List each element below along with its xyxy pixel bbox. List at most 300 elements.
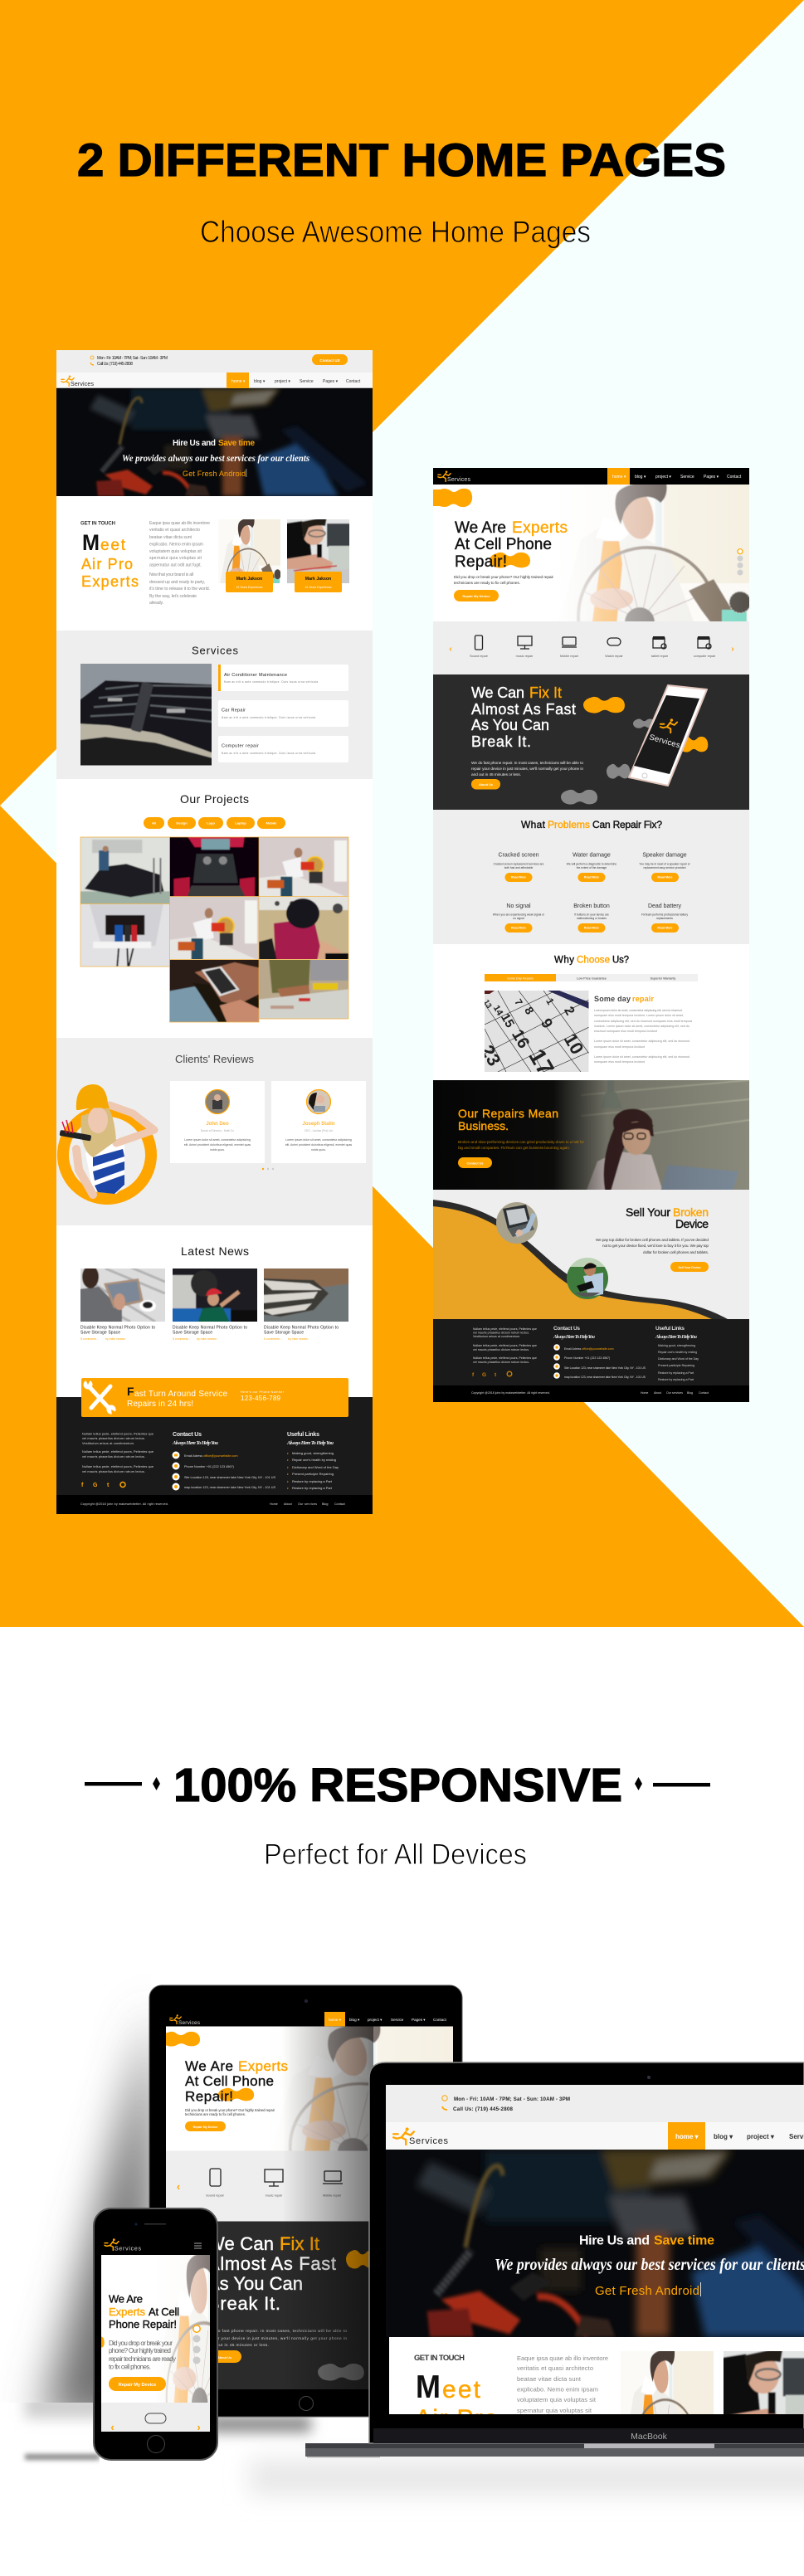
navigation bar: project ▾ xyxy=(655,475,671,480)
laptop screen: GET IN TOUCH xyxy=(414,2354,465,2363)
header bar: Mon - Fri: 10AM - 7PM; Sat - Sun: 10AM - 3PM xyxy=(97,356,168,361)
section: what problems can repair fix: Can Repair Fix? xyxy=(592,819,662,830)
photo: calendar: 8 xyxy=(522,1005,537,1017)
section: footer: Dictionary and Word of the Day xyxy=(292,1465,339,1469)
section: what problems can repair fix: Read More xyxy=(511,876,526,879)
section: footer: Contact xyxy=(334,1502,345,1506)
tablet screen: Mobile repair xyxy=(323,2194,342,2197)
section: footer: Copyright @2018 john by makewebbetter. All right reserved. xyxy=(471,1391,550,1395)
hero: cell phone repair: Repair! xyxy=(455,553,507,571)
tablet screen: home ▾ xyxy=(329,2018,342,2022)
laptop screen: explicabo. Nemo enim ipsam xyxy=(517,2386,598,2393)
section: footer: Blog xyxy=(322,1502,328,1506)
section: what problems can repair fix: both fast and affordable xyxy=(504,866,533,869)
section: footer: Vestibulum arisus at condimentum. xyxy=(82,1442,134,1445)
photo: calendar: 17 xyxy=(524,1045,559,1079)
section: get in touch: Air Pro xyxy=(81,556,133,572)
photo: calendar xyxy=(477,991,589,1079)
call to action banner: F xyxy=(127,1385,134,1398)
section: footer: Restore by replacing a Part xyxy=(658,1371,694,1375)
section: why choose us: eiusmod numquam eius modi tempora incidunt xyxy=(594,1030,657,1033)
section: footer: Nullam tellus pede, eleifend poors, Pellentes que xyxy=(82,1432,153,1435)
section: fix it fast: Almost As Fast xyxy=(471,701,576,718)
section: what problems can repair fix: no signal xyxy=(513,917,524,920)
section: what problems can repair fix: Read More xyxy=(658,926,672,929)
tablet screen: Services xyxy=(178,2020,201,2026)
phone screen: ‹ xyxy=(110,2421,115,2433)
section: clients reviews: CEO - Lacinia (Pvt) Ltd. xyxy=(305,1129,333,1132)
laptop screen: beatae vitae dicta sunt xyxy=(517,2375,582,2383)
section: get in touch: dressed up and ready to party, xyxy=(149,580,205,585)
section: what problems can repair fix: FixTeam performs professional battery xyxy=(641,913,688,916)
section: our projects: Our Projects xyxy=(180,792,249,806)
section: footer: map location 123, near shammer lake New York City, NY - 101 US xyxy=(564,1376,646,1379)
section: latest news: Save Storage Space xyxy=(173,1331,212,1336)
section: get in touch: By the way, let's celebrate xyxy=(149,594,197,599)
section: what problems can repair fix: Problems xyxy=(548,819,590,830)
tablet screen: We Are xyxy=(185,2058,233,2074)
section: footer: › xyxy=(287,1472,289,1477)
section: fix it fast: Fix It xyxy=(529,684,562,701)
section: services: Services xyxy=(192,644,239,657)
tablet screen: Did you drop or break your phone? Our highly trained repair xyxy=(185,2108,275,2112)
section: services: Nam ac elit a ante commodo tristique. Duis lacus urna vehicula xyxy=(224,680,318,684)
photo: calendar: 2 xyxy=(561,1005,577,1018)
section: footer: Email Adress office@yourwebsite.com xyxy=(564,1347,614,1351)
section: what problems can repair fix: replacements xyxy=(656,917,673,920)
section: why choose us: Us? xyxy=(612,956,629,966)
section: footer: › xyxy=(287,1465,289,1470)
section: why choose us: numquam eius modi tempora incidunt xyxy=(594,1045,645,1049)
section: footer: Restore by replacing a Part xyxy=(658,1378,694,1381)
laptop screen: home ▾ xyxy=(675,2133,699,2140)
section: services: Nam ac elit a ante commodo tristique. Duis lacus urna vehicula xyxy=(222,716,315,719)
section: get in touch: beatae vitae dicta sunt xyxy=(149,535,192,540)
section: footer: Useful Links xyxy=(655,1326,685,1332)
section: footer: Always Here To Help You xyxy=(553,1334,595,1340)
header bar xyxy=(56,350,373,373)
tablet screen: Fix It xyxy=(280,2233,319,2254)
navigation bar: Contact xyxy=(346,379,361,384)
section: what problems can repair fix: malfunctioning or broken xyxy=(577,917,607,920)
section: footer: t xyxy=(107,1483,110,1488)
section: get in touch: Now that your brand is all xyxy=(149,572,193,577)
photo: cable connectors xyxy=(80,904,169,967)
navigation bar xyxy=(433,468,749,485)
section: footer: Site Location 123, near shammer lake New York City, NY - 101 US xyxy=(184,1476,275,1479)
section: why choose us: Lorem ipsum dolor sit amet, consectetur adipiscing elit, sed do eiusmod xyxy=(594,1040,689,1043)
service icons row: Mobile repair xyxy=(560,655,579,658)
section: footer: vel mauris phasellus dictum rutrum lectus. xyxy=(82,1470,145,1473)
subheading: perfect for all devices: Perfect for All Devices xyxy=(264,1838,527,1871)
photo: calendar: 14 xyxy=(491,1004,505,1018)
section: footer: vel mauris phasellus dictum rutrum lectus. xyxy=(473,1348,529,1351)
tablet screen: and out in 45 minutes or less. xyxy=(207,2343,269,2348)
tablet screen: ‹ xyxy=(177,2180,180,2193)
illustration: worker in orange ring xyxy=(60,1084,154,1199)
section: footer: Always Here To Help You xyxy=(286,1440,334,1446)
navigation bar: Contact xyxy=(727,475,742,480)
illustration: tilted smartphone xyxy=(629,685,707,786)
hero: cell phone repair: Experts xyxy=(512,519,568,537)
section: clients reviews: Clients' Reviews xyxy=(175,1053,254,1065)
section: why choose us: Lorem ipsum dolor sit amet, consectetur adipiscing elit, sed do eiusmod xyxy=(594,1055,689,1059)
section: what problems can repair fix: Read More xyxy=(658,876,672,879)
hero banner: Get Fresh Android xyxy=(183,470,246,478)
hero banner: Hire Us and xyxy=(173,439,216,448)
section: what problems can repair fix: If buttons on your device are xyxy=(574,913,609,916)
laptop screen: Services xyxy=(409,2136,448,2146)
navigation bar: blog ▾ xyxy=(635,475,646,480)
laptop screen: veritatis et quasi architecto xyxy=(517,2364,593,2372)
laptop screen: voluptatem quia voluptas sit xyxy=(517,2396,597,2403)
photo: calendar: 10 xyxy=(560,1030,588,1058)
tablet screen: Almost As Fast xyxy=(207,2253,336,2274)
device: laptop xyxy=(305,2062,804,2505)
section: footer: › xyxy=(287,1458,289,1463)
section: get in touch: Experts xyxy=(81,573,139,590)
section: footer: Nullam tellus pede, eleifend poors, Pellentes que xyxy=(473,1356,537,1360)
section: footer: Dictionary and Word of the Day xyxy=(658,1357,699,1361)
section: footer: Repair one's health by resting xyxy=(658,1351,697,1354)
laptop screen: M xyxy=(416,2369,441,2405)
tablet screen: Contact xyxy=(433,2018,447,2022)
section: our repairs mean business: Our Repairs Mean xyxy=(458,1107,558,1120)
section: clients reviews: John Deo xyxy=(206,1122,229,1127)
section: what problems can repair fix: Read More xyxy=(584,926,599,929)
section: our projects: Logo xyxy=(207,821,215,825)
device: tablet xyxy=(149,1985,470,2417)
photo: calendar: 13 xyxy=(482,998,494,1010)
laptop screen: Hire Us and xyxy=(579,2233,650,2248)
section: what problems can repair fix: When you are experiencing weak signal or xyxy=(493,913,545,916)
hero banner xyxy=(56,388,373,496)
title: 2 DIFFERENT HOME PAGES xyxy=(77,134,726,186)
section: footer: › xyxy=(287,1480,289,1485)
section: footer: Present participle Repairing xyxy=(658,1364,694,1367)
section: get in touch: 12 Years Experience xyxy=(236,586,263,589)
laptop screen: Save time xyxy=(654,2233,714,2248)
call to action banner: Here's our Phone Number xyxy=(241,1390,285,1394)
tablet screen: At Cell Phone xyxy=(185,2073,274,2089)
section: fix it fast: Break It. xyxy=(471,733,531,750)
photo: tablet user circle xyxy=(567,1258,608,1299)
tablet screen: Break It. xyxy=(207,2293,280,2314)
tablet screen: We Can xyxy=(207,2233,274,2254)
call to action banner xyxy=(81,1378,348,1417)
hero: cell phone repair xyxy=(433,480,755,685)
service icons row: Sound repair xyxy=(470,655,489,658)
section: what problems can repair fix: Dead battery xyxy=(648,903,682,909)
photo: calendar: 15 xyxy=(498,1011,517,1030)
section: footer: Our services xyxy=(298,1502,317,1506)
navigation bar: Pages ▾ xyxy=(323,379,339,384)
photo: man at mitre saw xyxy=(256,835,351,898)
section: sell your broken device: Broken xyxy=(673,1205,709,1219)
section: clients reviews: Borad of Director - Multi Co xyxy=(201,1129,234,1132)
hero: cell phone repair: Did you drop or break your phone? Our highly trained repair xyxy=(454,575,553,580)
section: get in touch: voluptatem quia voluptas sit xyxy=(149,549,202,554)
device shadows xyxy=(25,2008,804,2496)
section: our repairs mean business: big and small companies. FixTeam can get business booming again. xyxy=(458,1146,570,1151)
navigation bar: Services xyxy=(71,382,95,387)
tablet screen: project ▾ xyxy=(368,2018,383,2022)
section: latest news: 5 comments - xyxy=(80,1337,99,1341)
section: what problems can repair fix: You may be in need of a speaker repair or xyxy=(639,863,691,866)
section: services: Air Conditioner Maintenance xyxy=(224,673,287,678)
section: services xyxy=(56,631,373,779)
section: fix it fast: We do fast phone repair. In most cases, technicians will be able to xyxy=(471,761,583,766)
section: footer: Our services xyxy=(666,1391,683,1395)
section: latest news: Disable Keep Normal Photo Option to xyxy=(80,1326,155,1331)
section: clients reviews: elit. Animi provident doloribus eligendi, eveniet quas xyxy=(285,1143,352,1147)
phone screen: › xyxy=(197,2421,201,2433)
navigation bar: Pages ▾ xyxy=(704,475,719,480)
hero: cell phone repair: At Cell Phone xyxy=(455,536,552,553)
section: latest news: by mike newton xyxy=(105,1337,125,1341)
navigation bar: home ▾ xyxy=(612,475,626,480)
section: services: Car Repair xyxy=(222,709,246,713)
section: footer: vel mauris phasellus dictum rutrum lectus. xyxy=(82,1455,145,1458)
tablet screen: repair your device in just minutes, we'll normally get your phone in xyxy=(207,2336,347,2341)
panel: home page 1 mockup xyxy=(56,350,373,1514)
photo: laptop user circle xyxy=(496,1202,538,1244)
device: phone xyxy=(91,2208,262,2471)
section: latest news: 5 comments - xyxy=(173,1337,191,1341)
section: what problems can repair fix: the extent of the damage xyxy=(577,866,607,869)
photo: phone in hands xyxy=(169,960,259,1022)
section: footer: G xyxy=(482,1372,486,1378)
header bar: Contact US xyxy=(319,358,340,363)
section: footer: Home xyxy=(270,1502,278,1506)
illustration: tilted smartphone: Services xyxy=(648,733,681,750)
section: why choose us: numquam eius modi tempora incidunt. Lorem ipsum dolor sit amet, xyxy=(594,1014,684,1017)
hero: cell phone repair: Repair My Device xyxy=(462,594,490,598)
panel: home page 2 mockup xyxy=(427,468,755,1402)
section: footer: map location 123, near shammer lake New York City, NY - 101 US xyxy=(184,1486,275,1489)
section: footer: Contact Us xyxy=(553,1326,580,1332)
section: latest news: by mike newton xyxy=(288,1337,308,1341)
tablet screen: Experts xyxy=(238,2058,288,2074)
section: fix it fast: and out in 45 minutes or less. xyxy=(471,772,521,777)
section: fix it fast: As You Can xyxy=(471,717,549,733)
section: footer xyxy=(433,1319,749,1402)
section: get in touch: 12 Years Experience xyxy=(305,586,332,589)
section: why choose us: Some day xyxy=(594,995,631,1003)
section: what problems can repair fix: We will perform a diagnostic to determine xyxy=(567,863,616,866)
section: what problems can repair fix: Read More xyxy=(584,876,599,879)
navigation bar: home ▾ xyxy=(231,379,246,384)
photo: calendar: 9 xyxy=(538,1015,556,1031)
photo: engine on stand xyxy=(80,838,169,904)
section: footer: Nullam tellus pede, eleifend poors, Pellentes que xyxy=(473,1327,537,1331)
section: our projects: Laptop xyxy=(235,821,246,825)
photo: man at workbench xyxy=(259,960,348,1019)
section: sell your broken device: dollar for broken cell phones and tablets. xyxy=(643,1250,709,1254)
section: what problems can repair fix: Cracked screen xyxy=(498,853,539,859)
section: sell your broken device: not to get your device fixed, we'd love to buy it for you. We pay top xyxy=(602,1244,709,1248)
section: get in touch xyxy=(56,496,373,631)
laptop screen: Get Fresh Android xyxy=(595,2284,699,2298)
section: services: Computer repair xyxy=(222,744,259,749)
service icons row: music repair xyxy=(516,655,534,658)
section: footer: Copyright @2018 john by makewebbetter. All right reserved. xyxy=(80,1502,168,1506)
service icons row: tablet repair xyxy=(651,655,669,658)
photo: man at mitre saw 2 xyxy=(167,894,261,962)
laptop screen: eet xyxy=(442,2376,481,2403)
section: footer: About xyxy=(284,1502,292,1506)
phone screen: We Are xyxy=(109,2293,143,2305)
section: why choose us xyxy=(433,944,749,1080)
tablet screen: About Us xyxy=(217,2356,231,2359)
call to action banner: 123-456-789 xyxy=(241,1395,281,1402)
laptop screen xyxy=(386,2085,804,2432)
section: latest news: Latest News xyxy=(181,1244,249,1258)
section: latest news: Save Storage Space xyxy=(80,1331,120,1336)
section: clients reviews: Lorem ipsum dolor sit amet, consectetur adipisicing xyxy=(184,1138,251,1142)
section: our repairs mean business: Broken and slow-performing devices can grind productivity down to a halt for xyxy=(458,1140,584,1145)
photo: calendar: 23 xyxy=(477,1041,505,1069)
section: footer: › xyxy=(287,1487,289,1492)
section: footer: › xyxy=(287,1452,289,1457)
phone screen: Did you drop or break your xyxy=(109,2340,173,2347)
section: our repairs mean business: Business. xyxy=(458,1119,509,1132)
service icons row xyxy=(433,621,749,674)
section: sell your broken device: Sell Your Device xyxy=(678,1266,701,1269)
hero banner: We provides always our best services for our clients xyxy=(122,452,309,464)
laptop screen: Call Us: (719) 445-2808 xyxy=(453,2106,514,2112)
service icons row: › xyxy=(731,645,734,654)
section: what problems can repair fix: Broken button xyxy=(573,903,610,909)
section: footer: Making good, strengthening xyxy=(658,1344,695,1347)
section: get in touch: Eaque ipsa quae ab illo inventore xyxy=(149,521,210,526)
navigation bar xyxy=(56,373,373,388)
laptop screen: Air Pro xyxy=(415,2405,498,2432)
section: footer: vel mauris phasellus dictum rutrum lectus. xyxy=(473,1331,529,1334)
section: get in touch: GET IN TOUCH xyxy=(80,521,115,526)
section: what problems can repair fix: No signal xyxy=(506,903,531,909)
section: footer: Repair one's health by resting xyxy=(292,1458,336,1462)
phone screen: Repair My Device xyxy=(119,2383,156,2388)
section: what problems can repair fix: What xyxy=(521,819,546,830)
section: get in touch: Mark Jakson xyxy=(305,577,331,582)
hero: cell phone repair: technicians are ready to fix cell phones. xyxy=(454,581,520,586)
photo: calendar: 7 xyxy=(512,997,525,1008)
photo: lab bench xyxy=(259,897,348,959)
section: get in touch: spernatur quia voluptas sit xyxy=(149,556,202,561)
photo: calendar: 16 xyxy=(508,1026,533,1052)
tablet screen: blog ▾ xyxy=(349,2018,360,2022)
section: sell your broken device: Device xyxy=(675,1217,709,1230)
section: latest news: 5 comments - xyxy=(264,1337,282,1341)
phone screen: At Cell xyxy=(149,2306,179,2318)
section: services: Nam ac elit a ante commodo tristique. Duis lacus urna vehicula xyxy=(222,752,315,755)
section: footer: Email Adress office@yourwebsite.com xyxy=(184,1454,238,1458)
section: sell your broken device: We pay top dollar for broken cell phones and tablets. If you've decided xyxy=(596,1238,709,1242)
section: footer: f xyxy=(81,1483,84,1488)
section: why choose us: Why xyxy=(554,956,574,966)
header bar: Call Us: (719) 445-2808 xyxy=(97,362,133,367)
section: clients reviews xyxy=(56,1038,373,1225)
laptop screen: Eaque ipsa quae ab illo inventore xyxy=(517,2354,608,2362)
section: footer: Nullam tellus pede, eleifend poors, Pellentes que xyxy=(82,1450,153,1454)
tablet screen: Service xyxy=(391,2018,404,2022)
section: latest news: Disable Keep Normal Photo Option to xyxy=(264,1326,339,1331)
tablet screen: Pages ▾ xyxy=(412,2018,426,2022)
section: why choose us: incidunt. Lorem ipsum dolor sit amet, consectetur adipiscing elit, sed do xyxy=(594,1025,689,1028)
phone screen: Experts xyxy=(109,2306,146,2318)
call to action banner: Repairs in 24 hrs! xyxy=(127,1400,193,1409)
section: clients reviews: elit. Animi provident doloribus eligendi, eveniet quas xyxy=(184,1143,251,1147)
section: get in touch: Mark Jakson xyxy=(236,577,262,582)
section: get in touch: M xyxy=(82,530,100,555)
navigation bar: project ▾ xyxy=(275,379,290,384)
section: our projects: All xyxy=(152,821,156,825)
section: our projects xyxy=(56,779,373,1038)
section: footer: Restore by replacing a Part xyxy=(292,1486,333,1490)
photo: calendar: 1 xyxy=(543,996,557,1007)
section: get in touch: aspernatur aut odit aut fugit. xyxy=(149,562,202,567)
photo: car console xyxy=(169,837,259,896)
tablet screen: Repair! xyxy=(185,2089,233,2104)
section: footer xyxy=(56,1397,373,1514)
navigation bar: Services xyxy=(447,477,471,483)
section: footer: Restore by replacing a Part xyxy=(292,1479,333,1483)
section: what problems can repair fix: Read More xyxy=(511,926,526,929)
tablet screen: technicians are ready to fix cell phones. xyxy=(185,2112,246,2116)
section: our projects: Design xyxy=(176,821,188,825)
laptop screen: spernatur quia voluptas sit xyxy=(517,2407,592,2414)
section: why choose us: Lorem ipsum dolor sit amet, consectetur adipiscing elit, sed do eiusmod xyxy=(594,1009,682,1012)
section: get in touch: explicabo. Nemo enim ipsam xyxy=(149,543,203,548)
phone screen: repair technicians are ready xyxy=(109,2355,176,2363)
section: footer: f xyxy=(472,1372,475,1378)
section: footer: t xyxy=(495,1372,497,1378)
section: footer: Contact xyxy=(699,1391,709,1395)
subtitle: Choose Awesome Home Pages xyxy=(200,215,591,249)
section: footer: About xyxy=(654,1391,661,1395)
navigation bar: Service xyxy=(680,475,694,480)
phone screen: phone? Our highly trained xyxy=(109,2347,171,2354)
section: footer: vel mauris phasellus dictum rutrum lectus. xyxy=(82,1437,145,1440)
phone screen xyxy=(101,2238,210,2433)
section: fix it fast: About Us xyxy=(479,783,493,786)
section: footer: Site Location 123, near shammer lake New York City, NY - 101 US xyxy=(564,1366,646,1370)
navigation bar: Service xyxy=(300,379,314,384)
phone screen: to fix cell phones. xyxy=(109,2363,151,2371)
section: footer: Vestibulum arisus at condimentum. xyxy=(473,1335,520,1338)
tablet screen: We do fast phone repair. In most cases, technicians will be able to xyxy=(207,2329,347,2334)
laptop screen: Mon - Fri: 10AM - 7PM; Sat - Sun: 10AM - 3PM xyxy=(454,2096,570,2102)
section: sell your broken device: Sell Your xyxy=(626,1205,670,1219)
section: our projects: Mobile xyxy=(266,821,277,825)
section: footer: Contact Us xyxy=(173,1432,202,1438)
section: sell your broken device xyxy=(433,1190,749,1319)
background: pale diagonal shape xyxy=(0,0,804,1627)
section: footer: Always Here To Help You xyxy=(172,1440,218,1446)
tablet screen: Repair My Device xyxy=(193,2126,217,2129)
section: fix it fast: repair your device in just minutes, we'll normally get your phone in xyxy=(471,767,583,772)
section: footer: Present participle Repairing xyxy=(292,1472,334,1476)
section: footer: Making good, strengthening xyxy=(292,1451,334,1455)
hero: cell phone repair: We Are xyxy=(455,519,506,537)
section: footer: G xyxy=(93,1483,98,1488)
section: why choose us: numquam eius modi tempora incidunt xyxy=(594,1060,645,1064)
section: footer: Phone Number +01 (222 123 4567) xyxy=(184,1465,235,1468)
section: fix it fast: We Can xyxy=(471,684,524,701)
tablet screen: As You Can xyxy=(207,2273,303,2294)
section: fix it fast xyxy=(433,674,749,810)
